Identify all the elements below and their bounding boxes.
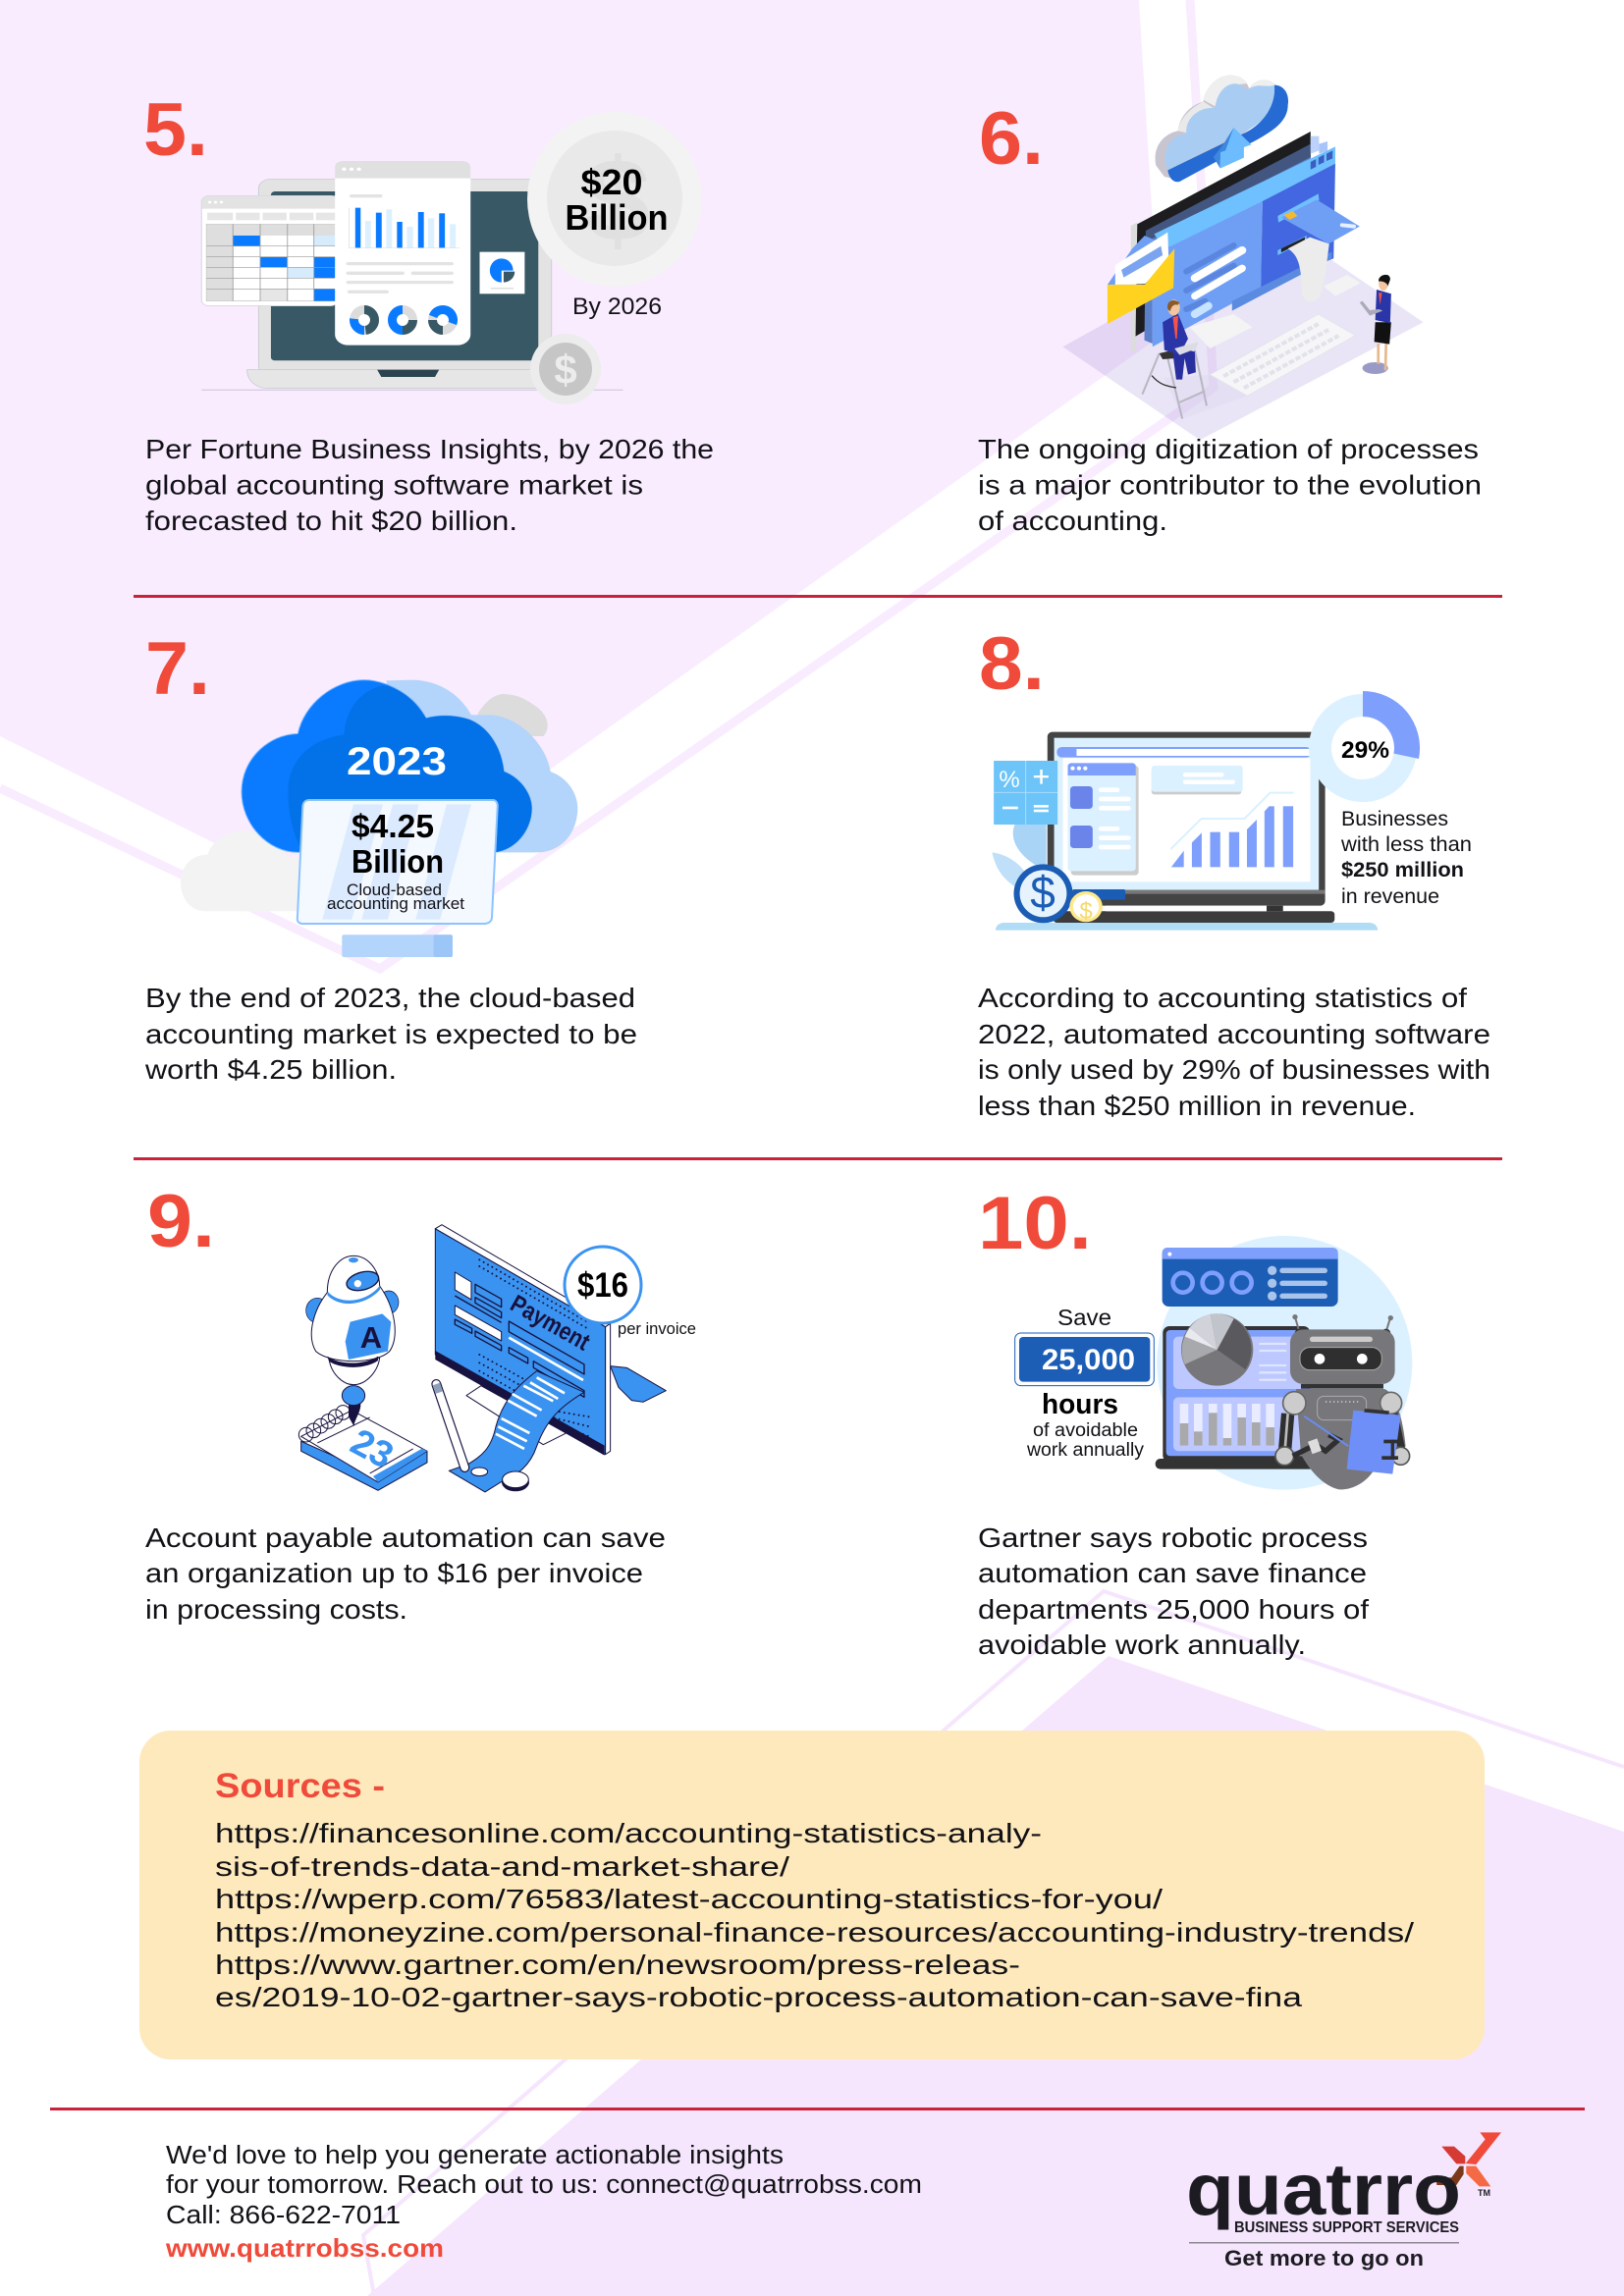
text block 8: 2022, automated accounting software	[978, 1019, 1490, 1049]
panel: statistic 5	[143, 88, 714, 536]
donut chart: 29%: 29%	[1341, 737, 1389, 764]
callout: $4.25 billion: accounting market	[327, 894, 464, 913]
panel: statistic 6	[978, 76, 1482, 536]
callout: businesses under $250 million: Businesses	[1341, 808, 1448, 830]
text block 10	[978, 1522, 1369, 1660]
source links	[215, 1818, 1414, 2012]
callout: 25,000 hours: of avoidable	[1033, 1420, 1138, 1441]
illustration: robot, calendar and payment monitor	[298, 1225, 666, 1492]
text block 7: By the end of 2023, the cloud-based	[145, 983, 635, 1013]
logo: quatrro business support services: TM	[1478, 2188, 1490, 2198]
number 5: 5.	[143, 88, 208, 172]
text block 8	[978, 983, 1490, 1121]
text block 9: an organization up to $16 per invoice	[145, 1558, 643, 1588]
source links: es/2019-10-02-gartner-says-robotic-process-automation-can-save-fina	[215, 1982, 1303, 2012]
icon: small dollar coin: $	[554, 347, 577, 393]
big coin callout: $20 Billion: $20	[581, 162, 642, 202]
text block 10: automation can save finance	[978, 1558, 1367, 1588]
number 7: 7.	[145, 627, 210, 711]
callout: $4.25 billion: $4.25	[352, 808, 434, 844]
text block 8: is only used by 29% of businesses with	[978, 1054, 1490, 1085]
text block 8: According to accounting statistics of	[978, 983, 1467, 1013]
callout: 25,000 hours	[1026, 1344, 1145, 1461]
donut charts	[353, 307, 456, 333]
panel: statistic 7	[144, 627, 637, 1085]
callout: businesses under $250 million: $250 million	[1341, 859, 1464, 881]
callout: businesses under $250 million	[1340, 808, 1472, 908]
logo: quatrro business support services: BUSINESS SUPPORT SERVICES	[1234, 2219, 1459, 2236]
callout: businesses under $250 million: with less than	[1340, 833, 1472, 856]
source links: https://www.gartner.com/en/newsroom/press-releas-	[215, 1949, 1020, 1980]
source links: https://wperp.com/76583/latest-accounting-statistics-for-you/	[215, 1884, 1163, 1914]
callout: businesses under $250 million: in revenue	[1341, 885, 1439, 908]
text block 6	[978, 434, 1482, 536]
logo mark: X arrow	[1436, 2132, 1501, 2186]
text block 9: Account payable automation can save	[145, 1522, 666, 1553]
source links: sis-of-trends-data-and-market-share/	[215, 1851, 789, 1882]
label: A on robot: A	[360, 1320, 382, 1355]
text block 5: forecasted to hit $20 billion.	[145, 506, 517, 536]
panel: statistic 9	[145, 1180, 696, 1625]
logo: quatrro business support services: quatrro	[1186, 2149, 1461, 2230]
icon: dollar symbols on coins: $	[1030, 867, 1056, 918]
footer contact text: for your tomorrow. Reach out to us: connect@quatrrobss.com	[166, 2171, 922, 2199]
footer contact text: We'd love to help you generate actionable insights	[166, 2142, 784, 2169]
number 9: 9.	[147, 1180, 215, 1263]
callout: 25,000 hours: hours	[1042, 1389, 1118, 1420]
source links: https://financesonline.com/accounting-statistics-analy-	[215, 1818, 1042, 1848]
text block 10: Gartner says robotic process	[978, 1522, 1368, 1553]
text block 8: less than $250 million in revenue.	[978, 1091, 1416, 1121]
label: 2023: 2023	[347, 740, 447, 783]
logo: quatrro business support services: Get more to go on	[1224, 2246, 1424, 2270]
logo: quatrro business support services	[1186, 2132, 1501, 2270]
illustration: robot with dashboard	[1015, 1236, 1412, 1490]
illustration: laptop with reports	[201, 161, 623, 390]
text block 6: The ongoing digitization of processes	[978, 434, 1479, 464]
sources heading: Sources -	[215, 1767, 385, 1805]
number 10: 10.	[978, 1182, 1092, 1265]
footer contact text	[165, 2142, 922, 2263]
callout: 25,000 hours: 25,000	[1042, 1344, 1135, 1376]
text block 7: worth $4.25 billion.	[144, 1054, 397, 1085]
text block 6: of accounting.	[978, 506, 1167, 536]
text block 7: accounting market is expected to be	[145, 1019, 637, 1049]
icon: small dollar coin	[530, 334, 601, 404]
text block 6: is a major contributor to the evolution	[978, 469, 1482, 501]
big coin callout: $20 Billion: $	[585, 134, 650, 266]
callout: $4.25 billion: Cloud-based	[347, 881, 442, 899]
illustration: isometric digital workspace	[1062, 76, 1424, 440]
footer contact text: www.quatrrobss.com	[165, 2233, 444, 2263]
text block 7	[144, 983, 637, 1085]
text block 9	[145, 1522, 666, 1625]
text block 5: global accounting software market is	[145, 469, 643, 501]
illustration: cloud with screen	[181, 680, 577, 957]
text block 10: avoidable work annually.	[978, 1629, 1306, 1660]
illustration: laptop with chart, calculator and coins	[992, 732, 1378, 931]
text block 5	[145, 434, 714, 536]
label: save: Save	[1057, 1305, 1111, 1330]
calculator percent symbol: %	[999, 767, 1020, 793]
footer contact text: Call: 866-622-7011	[166, 2202, 401, 2229]
label: calendar date: 23	[344, 1421, 400, 1477]
number 6: 6.	[979, 97, 1044, 181]
panel: statistic 10	[978, 1182, 1412, 1660]
big coin callout: $20 Billion: Billion	[566, 197, 668, 238]
big coin callout: $20 Billion	[527, 112, 702, 287]
panel: statistic 8	[978, 622, 1490, 1121]
source links: https://moneyzine.com/personal-finance-resources/accounting-industry-trends/	[215, 1917, 1414, 1948]
callout: $4.25 billion: Billion	[352, 843, 444, 880]
icon: dollar symbols on coins	[1030, 867, 1093, 925]
number 8: 8.	[979, 622, 1045, 706]
text block 5: Per Fortune Business Insights, by 2026 the	[145, 434, 714, 464]
callout: $16 per invoice: $16	[577, 1266, 628, 1305]
callout: $4.25 billion	[327, 808, 464, 913]
callout: $16 per invoice: per invoice	[618, 1319, 696, 1338]
panel: sources	[139, 1731, 1485, 2059]
callout: $16 per invoice	[565, 1247, 696, 1338]
text block 10: departments 25,000 hours of	[978, 1594, 1369, 1625]
icon: dollar symbols on coins: $	[1079, 898, 1093, 925]
text block 9: in processing costs.	[145, 1594, 407, 1625]
label: by 2026: By 2026	[572, 294, 662, 320]
callout: 25,000 hours: work annually	[1026, 1440, 1145, 1461]
donut chart: 29%	[1309, 691, 1420, 802]
label: Payment on monitor: Payment	[506, 1290, 595, 1357]
